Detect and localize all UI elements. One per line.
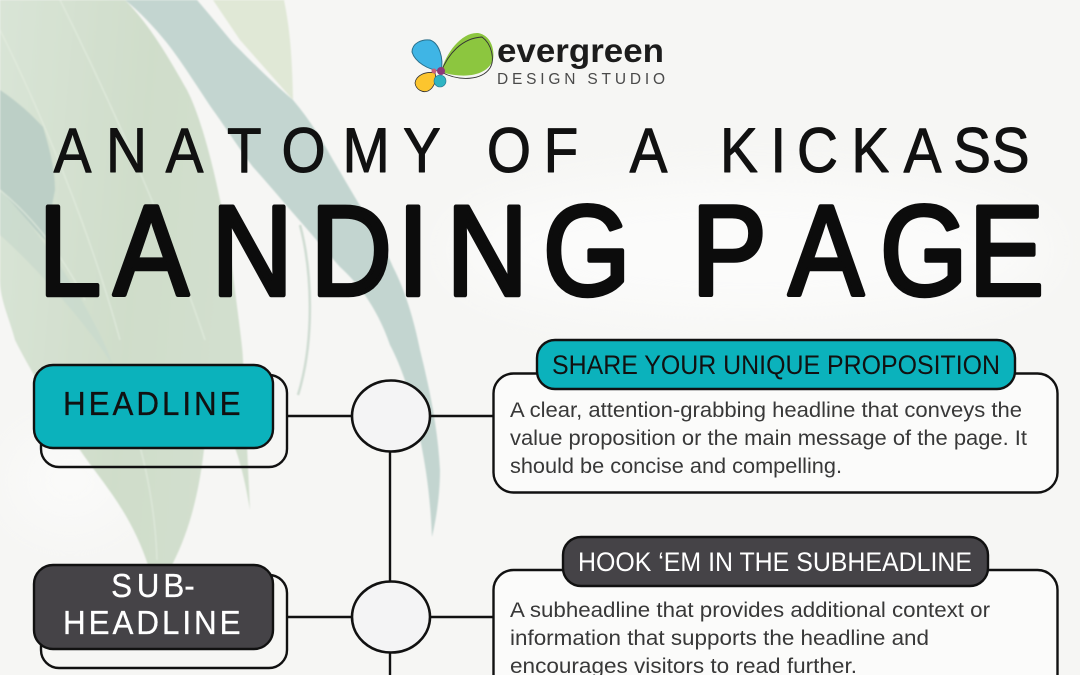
card heading pill: SHARE YOUR UNIQUE PROPOSITION	[552, 350, 1000, 380]
label: subheadline: SUB-	[111, 567, 195, 604]
card heading pill	[537, 340, 1015, 389]
card body text: should be concise and compelling.	[510, 455, 842, 478]
label: subheadline	[34, 565, 273, 649]
card body text	[510, 599, 990, 675]
card heading pill	[563, 537, 988, 586]
logo tagline: DESIGN STUDIO	[497, 71, 665, 88]
logo: Evergreen Design Studio	[412, 32, 665, 92]
card body text: information that supports the headline and	[510, 627, 929, 650]
card body text	[510, 399, 1027, 478]
card: hook 'em in the subheadline	[494, 537, 1058, 675]
back plate	[41, 375, 287, 467]
card: share your unique proposition	[494, 340, 1058, 492]
row: headline	[34, 340, 1058, 492]
vertical timeline connector	[389, 452, 391, 675]
timeline node	[352, 380, 430, 452]
card body text: A clear, attention-grabbing headline that conveys the	[510, 399, 1022, 422]
label: headline	[34, 365, 273, 448]
logo wordmark: evergreen	[497, 32, 664, 69]
title line 1: ANATOMY OF A KICKASS	[54, 115, 1030, 186]
icon: butterfly logo mark	[412, 33, 493, 92]
row: subheadline	[34, 537, 1058, 675]
back plate	[41, 575, 287, 668]
title line 2: LANDING PAGE	[39, 179, 1044, 323]
card body text: value proposition or the main message of the page. It	[510, 427, 1027, 450]
connector: subheadline to card	[287, 616, 494, 618]
label: headline: HEADLINE	[63, 385, 241, 422]
card heading pill: HOOK ‘EM IN THE SUBHEADLINE	[578, 547, 972, 577]
connector: headline to card	[287, 415, 494, 417]
card body text: A subheadline that provides additional context or	[510, 599, 990, 622]
background eucalyptus leaves	[0, 0, 440, 565]
label: subheadline: HEADLINE	[63, 604, 241, 641]
timeline node	[352, 582, 430, 652]
